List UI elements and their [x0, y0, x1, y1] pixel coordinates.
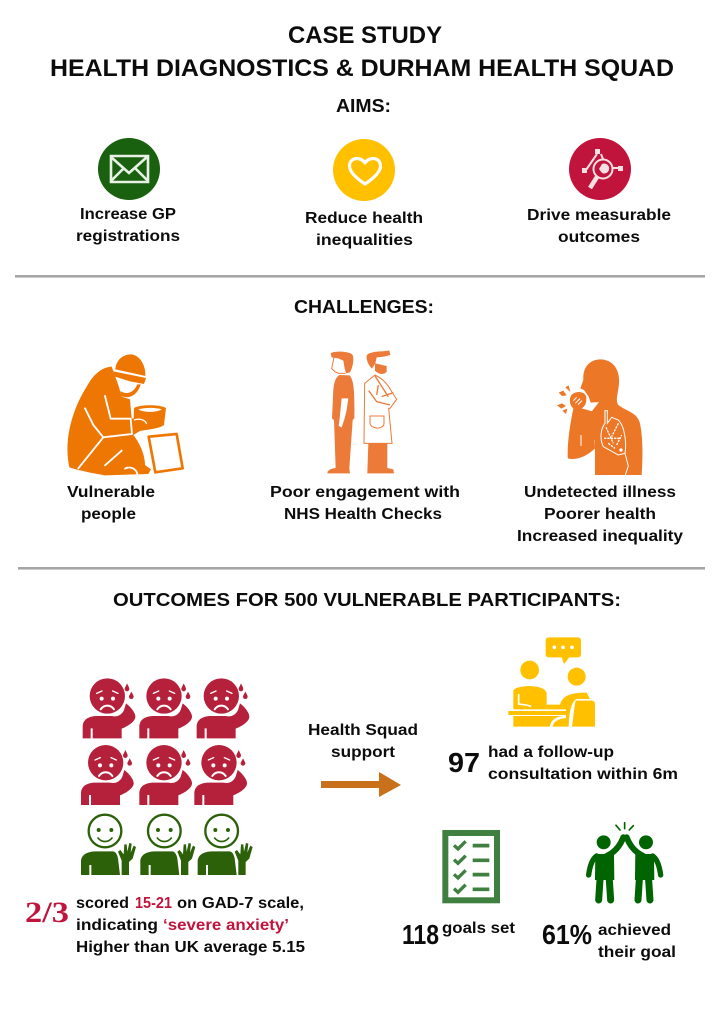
- title: [50, 22, 674, 82]
- text: poor engagement: Poor engagement with: [270, 484, 460, 501]
- statistic: goals achieved: 61%: [542, 919, 592, 950]
- statistic: follow-up consultations: consultation within 6m: [488, 766, 678, 783]
- icon: envelope: [98, 138, 160, 200]
- text: undetected illness: [517, 484, 683, 545]
- heading: challenges: CHALLENGES:: [294, 297, 434, 317]
- text: vulnerable people: [67, 484, 155, 523]
- text: reduce health inequalities: inequalities: [316, 232, 413, 249]
- icon: checklist: [442, 830, 500, 903]
- text: poor engagement: NHS Health Checks: [284, 506, 442, 523]
- statistic: goals achieved: [542, 919, 676, 961]
- text: vulnerable people: people: [81, 506, 136, 523]
- text: health squad support: Health Squad: [308, 722, 418, 739]
- pictogram: six anxious people and three happy people: [81, 678, 253, 875]
- text: undetected illness: Undetected illness: [524, 484, 676, 501]
- patient: [327, 352, 354, 473]
- text: vulnerable people: Vulnerable: [67, 484, 155, 501]
- statistic: severe anxiety: ‘severe anxiety’: [163, 917, 289, 934]
- statistic: severe anxiety: 2/3: [25, 896, 69, 929]
- heading: aims: AIMS:: [336, 96, 391, 116]
- statistic: goals achieved: achieved: [598, 922, 671, 939]
- icon: coughing person with lungs: [557, 359, 642, 475]
- text: drive measurable outcomes: outcomes: [558, 229, 640, 246]
- statistic: goals set: 118: [402, 919, 439, 950]
- icon: patient and doctor back to back: [327, 350, 397, 473]
- icon: magnifier analytics: [569, 138, 631, 200]
- arrow: [321, 772, 401, 797]
- statistic: severe anxiety: indicating: [76, 917, 158, 934]
- doctor: [364, 350, 397, 473]
- text: increase GP registrations: registrations: [76, 228, 180, 245]
- statistic: follow-up consultations: [448, 744, 678, 783]
- text: drive measurable outcomes: [527, 207, 671, 246]
- statistic: severe anxiety: [25, 895, 305, 956]
- text: increase GP registrations: [76, 206, 180, 245]
- statistic: severe anxiety: Higher than UK average 5.15: [76, 939, 305, 956]
- statistic: goals set: goals set: [442, 920, 515, 937]
- icon: heart: [333, 139, 395, 201]
- statistic: severe anxiety: scored: [76, 895, 129, 912]
- text: undetected illness: Increased inequality: [517, 528, 683, 545]
- statistic: goals set: [402, 919, 515, 950]
- title: HEALTH DIAGNOSTICS & DURHAM HEALTH SQUAD: [50, 55, 674, 82]
- icon: high five: [589, 823, 661, 900]
- statistic: follow-up consultations: had a follow-up: [488, 744, 614, 761]
- statistic: severe anxiety: on GAD-7 scale,: [177, 895, 304, 912]
- text: reduce health inequalities: [305, 210, 423, 249]
- icon: homeless person with bowl: [67, 354, 183, 475]
- text: reduce health inequalities: Reduce health: [305, 210, 423, 227]
- heading: outcomes: OUTCOMES FOR 500 VULNERABLE PARTICIPANTS:: [113, 590, 621, 610]
- statistic: follow-up consultations: 97: [448, 747, 480, 778]
- text: poor engagement: [270, 484, 460, 523]
- text: undetected illness: Poorer health: [544, 506, 656, 523]
- title: CASE STUDY: [288, 22, 442, 49]
- statistic: goals achieved: their goal: [598, 944, 676, 961]
- panel: challenges: [67, 350, 683, 545]
- text: drive measurable outcomes: Drive measurable: [527, 207, 671, 224]
- statistic: severe anxiety: 15-21: [135, 895, 172, 912]
- text: health squad support: [308, 722, 418, 761]
- text: increase GP registrations: Increase GP: [80, 206, 176, 223]
- icon: consultation: [508, 637, 595, 727]
- text: health squad support: support: [331, 744, 395, 761]
- panel: aims: [76, 138, 671, 249]
